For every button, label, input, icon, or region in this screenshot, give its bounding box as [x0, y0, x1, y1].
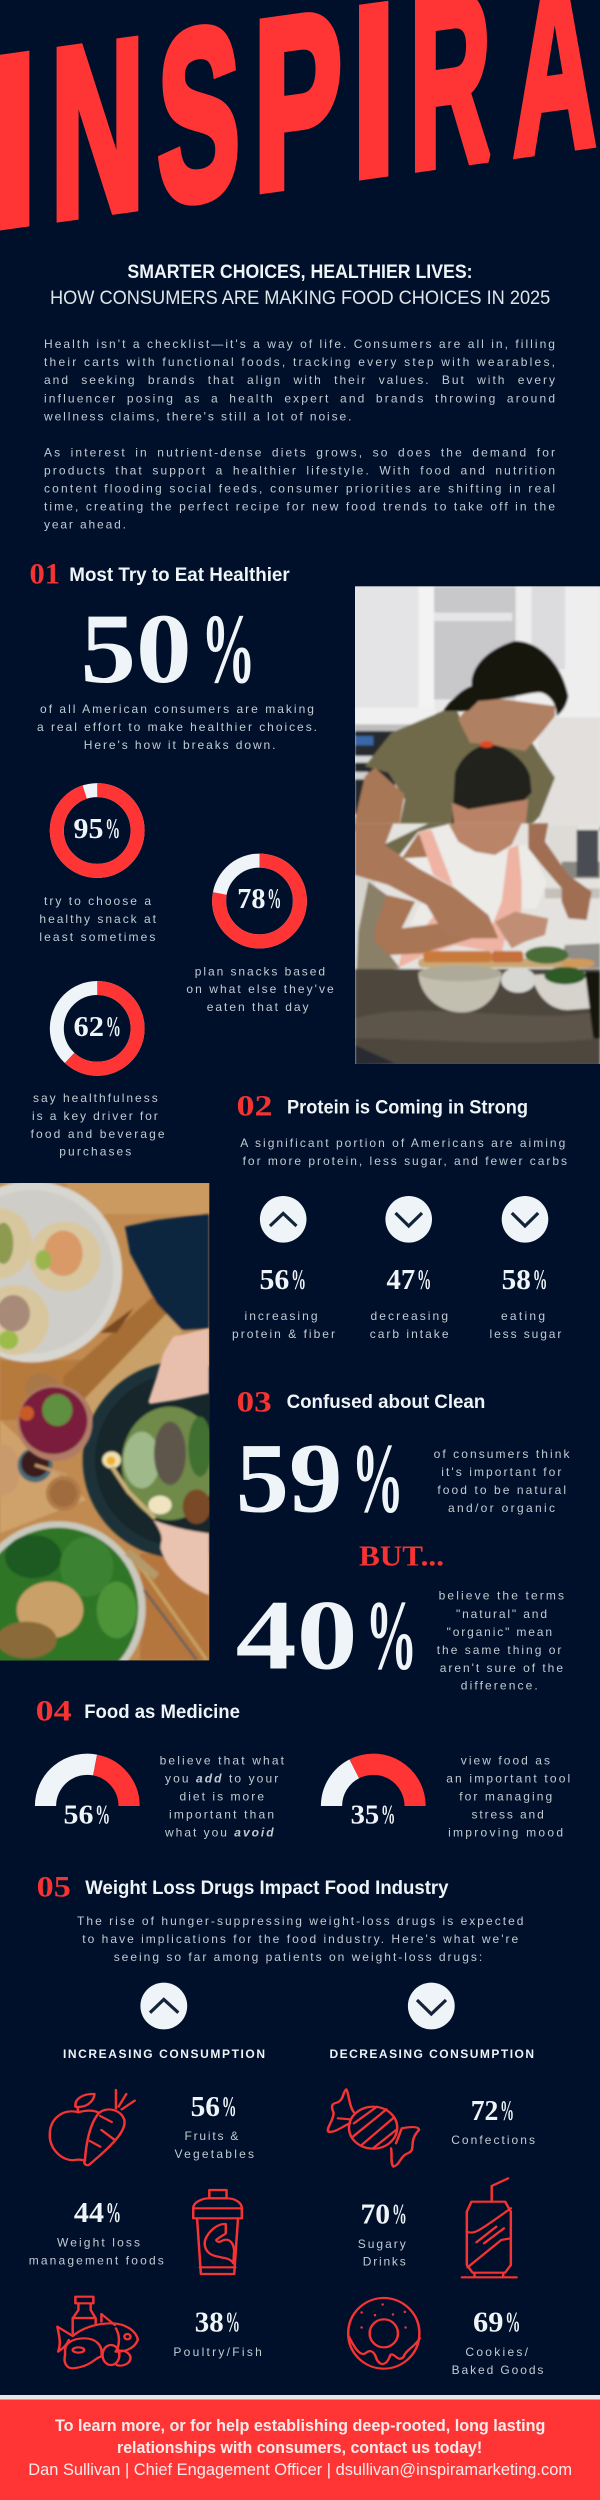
section 05 intro text: [77, 1914, 523, 1964]
stat: 44% weight loss foods: 44: [74, 2198, 104, 2229]
donut chart: 95%: [57, 790, 138, 871]
stat: 70% sugary drinks: [358, 2200, 407, 2269]
heading: increasing consumption: INCREASING CONSUMPTION: [63, 2047, 265, 2061]
gauge chart: 35%: 35: [351, 1799, 379, 1829]
stat: 56% protein and fiber: %: [291, 1265, 306, 1296]
photo: mother and daughter cooking: [355, 586, 600, 1066]
stat: 40%: difference.: [461, 1678, 538, 1692]
stat: 50%: 50: [80, 593, 192, 704]
stat: 70% sugary drinks: Drinks: [363, 2255, 406, 2269]
caption: 78%: on what else they've: [186, 982, 334, 996]
stat: 69% cookies and baked goods: %: [505, 2308, 520, 2339]
stat: 47% carb intake: [370, 1265, 449, 1341]
stat: 69% cookies and baked goods: Cookies/: [465, 2345, 529, 2359]
stat: 72% confections: [451, 2096, 535, 2147]
stat: 69% cookies and baked goods: 69: [473, 2308, 503, 2339]
caption: 56% add vs avoid: believe that what: [160, 1754, 285, 1768]
stat: 69% cookies and baked goods: Baked Goods: [452, 2363, 543, 2377]
stat: 50%: a real effort to make healthier choices.: [37, 720, 317, 734]
section 03 heading: [236, 1385, 485, 1418]
stat: 56% protein and fiber: protein & fiber: [232, 1327, 335, 1341]
stat: 44% weight loss foods: %: [106, 2198, 121, 2229]
stat: 58% less sugar: %: [533, 1265, 547, 1296]
stat: 40%: %: [366, 1580, 417, 1691]
gauge chart: 56%: 56: [64, 1799, 93, 1829]
section 05 heading: Weight Loss Drugs Impact Food Industry: [85, 1878, 449, 1899]
text block: intro paragraph 2: content flooding social feeds, consumer priorities are shifting in real: [44, 482, 555, 496]
stat: 58% less sugar: [490, 1265, 561, 1341]
section 01 heading: 01: [30, 557, 60, 590]
stat: 58% less sugar: 58: [502, 1265, 531, 1296]
stat: 56% protein and fiber: [232, 1265, 335, 1341]
heading: report title: HOW CONSUMERS ARE MAKING FOOD CHOICES IN 2025: [50, 288, 550, 309]
stat: 59%: and/or organic: [448, 1501, 555, 1515]
caption: 35% stress and mood: stress and: [472, 1808, 544, 1822]
text block: intro paragraph 1: Health isn't a checklist—it's a way of life. Consumers are all in, filling: [44, 337, 555, 351]
section 01 heading: [30, 557, 290, 590]
icon: candy: [328, 2089, 419, 2167]
section 02 intro text: A significant portion of Americans are aiming: [240, 1136, 565, 1150]
stat: 56% fruits and vegetables: Fruits &: [184, 2129, 238, 2143]
photo: overhead table of plated food: [0, 1183, 210, 1660]
section 02 intro text: [240, 1136, 567, 1168]
stat: 40%: 40: [236, 1580, 358, 1691]
caption: 56% add vs avoid: you add to your: [165, 1772, 278, 1786]
caption: 35% stress and mood: improving mood: [448, 1826, 563, 1840]
text block: intro paragraph 2: As interest in nutrient-dense diets grows, so does the demand for: [44, 445, 555, 459]
donut chart: 78%: 78: [237, 884, 266, 915]
heading: report title: SMARTER CHOICES, HEALTHIER LIVES:: [127, 262, 473, 283]
heading: decreasing consumption: DECREASING CONSUMPTION: [330, 2047, 534, 2061]
donut chart: 78%: [219, 861, 300, 941]
callout: BUT...: BUT...: [359, 1540, 444, 1572]
icon: down chevron, sugar: [502, 1196, 548, 1243]
gauge chart: 35%: %: [381, 1799, 395, 1829]
footer: contact banner: Dan Sullivan | Chief Engagement Officer | dsullivan@inspiramarketing.com: [28, 2460, 572, 2479]
caption: 62%: purchases: [59, 1145, 131, 1159]
stat: 38% poultry and fish: %: [226, 2308, 240, 2339]
stat: 50%: of all American consumers are making: [40, 702, 314, 716]
stat: 70% sugary drinks: %: [392, 2200, 407, 2231]
stat: 38% poultry and fish: Poultry/Fish: [173, 2345, 262, 2359]
footer: contact banner: To learn more, or for help establishing deep-rooted, long lasting: [55, 2416, 545, 2435]
caption: 56% add vs avoid: important than: [169, 1808, 274, 1822]
section 04 heading: Food as Medicine: [84, 1702, 240, 1723]
section 05 heading: 05: [37, 1871, 71, 1904]
stat: 59%: %: [352, 1422, 404, 1533]
stat: 70% sugary drinks: 70: [360, 2200, 390, 2231]
stat: 38% poultry and fish: [173, 2308, 262, 2359]
footer: contact banner: [0, 2395, 600, 2500]
icon: apple and carrot: [50, 2090, 135, 2165]
donut chart: 95%: %: [105, 814, 120, 845]
section 02 heading: Protein is Coming in Strong: [287, 1098, 528, 1119]
caption: 62%: [31, 1091, 165, 1159]
section 02 heading: [236, 1090, 528, 1123]
heading: report title: [50, 262, 550, 309]
text block: intro paragraph 1: and seeking brands that align with their values. But with every: [44, 373, 555, 387]
text block: intro paragraph 2: year ahead.: [44, 518, 126, 532]
stat: 59%: it's important for: [441, 1465, 561, 1479]
stat: 56% fruits and vegetables: [174, 2092, 254, 2161]
stat: 56% fruits and vegetables: %: [222, 2092, 236, 2123]
stat: 58% less sugar: less sugar: [490, 1327, 561, 1341]
caption: 35% stress and mood: view food as: [461, 1754, 550, 1768]
stat: 56% fruits and vegetables: Vegetables: [174, 2147, 254, 2161]
stat: 69% cookies and baked goods: [452, 2308, 543, 2377]
stat: 47% carb intake: decreasing: [370, 1309, 448, 1323]
icon: down chevron, carbs: [385, 1196, 432, 1243]
section 03 heading: 03: [236, 1385, 272, 1418]
icon: up chevron, protein: [260, 1196, 307, 1243]
gauge chart: 56%: %: [95, 1799, 110, 1829]
stat: 44% weight loss foods: Weight loss: [57, 2236, 140, 2250]
caption: 95%: try to choose a: [44, 894, 151, 908]
gauge chart: 56%: [46, 1764, 129, 1829]
caption: 78%: plan snacks based: [195, 965, 325, 979]
caption: 95%: healthy snack at: [39, 912, 157, 926]
donut chart: 62%: [57, 988, 138, 1069]
section 01 heading: Most Try to Eat Healthier: [69, 565, 290, 586]
caption: 35% stress and mood: for managing: [459, 1790, 552, 1804]
caption: 56% add vs avoid: what you avoid: [164, 1826, 274, 1840]
donut chart: 62%: 62: [74, 1012, 104, 1043]
icon: protein foods, fish, meat, egg and bottle: [57, 2297, 138, 2368]
donut chart: 62%: %: [106, 1012, 121, 1043]
section 04 heading: [36, 1694, 240, 1727]
stat: 50%: %: [201, 593, 256, 704]
stat: 47% carb intake: 47: [386, 1265, 415, 1296]
icon: donut: [348, 2298, 420, 2369]
stat: 59%: 59: [236, 1422, 342, 1533]
section 02 intro text: for more protein, less sugar, and fewer carbs: [243, 1154, 567, 1168]
section 04 heading: 04: [36, 1694, 72, 1727]
text block: intro paragraph 1: wellness claims, there's still a lot of noise.: [43, 409, 352, 423]
text block: intro paragraph 2: [44, 445, 555, 532]
section 05 intro text: seeing so far among patients on weight-loss drugs:: [114, 1950, 482, 1964]
stat: 59%: of consumers think: [434, 1447, 570, 1461]
caption: 56% add vs avoid: diet is more: [180, 1790, 264, 1804]
icon: soda can: [462, 2178, 517, 2277]
caption: 62%: food and beverage: [31, 1127, 165, 1141]
text block: intro paragraph 1: [43, 337, 555, 423]
stat: 44% weight loss foods: management foods: [29, 2254, 164, 2268]
stat: 58% less sugar: eating: [501, 1309, 545, 1323]
icon: up chevron, increasing: [140, 1983, 187, 2029]
stat: 56% fruits and vegetables: 56: [191, 2092, 220, 2123]
stat: 50%: Here's how it breaks down.: [84, 738, 276, 752]
caption: 62%: say healthfulness: [33, 1091, 158, 1105]
text block: intro paragraph 1: influencer posing as a health expert and brands throwing around: [44, 391, 555, 405]
stat: 59%: food to be natural: [437, 1483, 566, 1497]
logo title: INSPIRA: [0, 0, 596, 278]
stat: 47% carb intake: carb intake: [370, 1327, 449, 1341]
text block: intro paragraph 2: products that support a healthier lifestyle. With food and nutrition: [44, 463, 555, 477]
stat: 56% protein and fiber: 56: [260, 1265, 289, 1296]
stat: 72% confections: 72: [471, 2096, 498, 2127]
caption: 95%: [39, 894, 157, 944]
donut chart: 78%: %: [267, 884, 281, 915]
caption: 78%: [186, 965, 334, 1014]
stat: 40%: believe the terms: [439, 1589, 564, 1603]
stat: 72% confections: %: [500, 2096, 514, 2127]
stat: 72% confections: Confections: [451, 2133, 535, 2147]
section 03 heading: Confused about Clean: [287, 1392, 485, 1413]
stat: 40%: "organic" mean: [447, 1625, 552, 1639]
caption: 35% stress and mood: [446, 1754, 570, 1840]
section 05 heading: [37, 1871, 449, 1904]
section 05 intro text: to have implications for the food industry. Here's what we're: [82, 1932, 519, 1946]
caption: 56% add vs avoid: [160, 1754, 285, 1840]
stat: 40%: [236, 1580, 564, 1692]
icon: protein shaker: [193, 2190, 242, 2274]
stat: 59%: [236, 1422, 570, 1533]
text block: intro paragraph 2: time, creating the perfect recipe for new food trends to take off in the: [44, 500, 555, 514]
footer: contact banner: relationships with consumers, contact us today!: [117, 2438, 482, 2457]
caption: 62%: is a key driver for: [32, 1109, 158, 1123]
caption: 95%: least sometimes: [39, 930, 155, 944]
stat: 44% weight loss foods: [29, 2198, 164, 2268]
section 05 intro text: The rise of hunger-suppressing weight-loss drugs is expected: [77, 1914, 523, 1928]
stat: 47% carb intake: %: [417, 1265, 431, 1296]
stat: 40%: "natural" and: [456, 1607, 547, 1621]
donut chart: 95%: 95: [74, 814, 103, 845]
caption: 35% stress and mood: an important tool: [446, 1772, 570, 1786]
stat: 40%: aren't sure of the: [440, 1661, 563, 1675]
text block: intro paragraph 1: their carts with functional foods, tracking every step with wearables,: [44, 355, 555, 369]
stat: 50%: [37, 593, 317, 752]
icon: down chevron, decreasing: [408, 1983, 455, 2029]
stat: 40%: the same thing or: [437, 1643, 561, 1657]
section 02 heading: 02: [236, 1090, 272, 1123]
stat: 70% sugary drinks: Sugary: [358, 2237, 406, 2251]
caption: 78%: eaten that day: [207, 1000, 308, 1014]
stat: 56% protein and fiber: increasing: [244, 1309, 318, 1323]
gauge chart: 35%: [332, 1764, 415, 1829]
stat: 38% poultry and fish: 38: [195, 2308, 224, 2339]
